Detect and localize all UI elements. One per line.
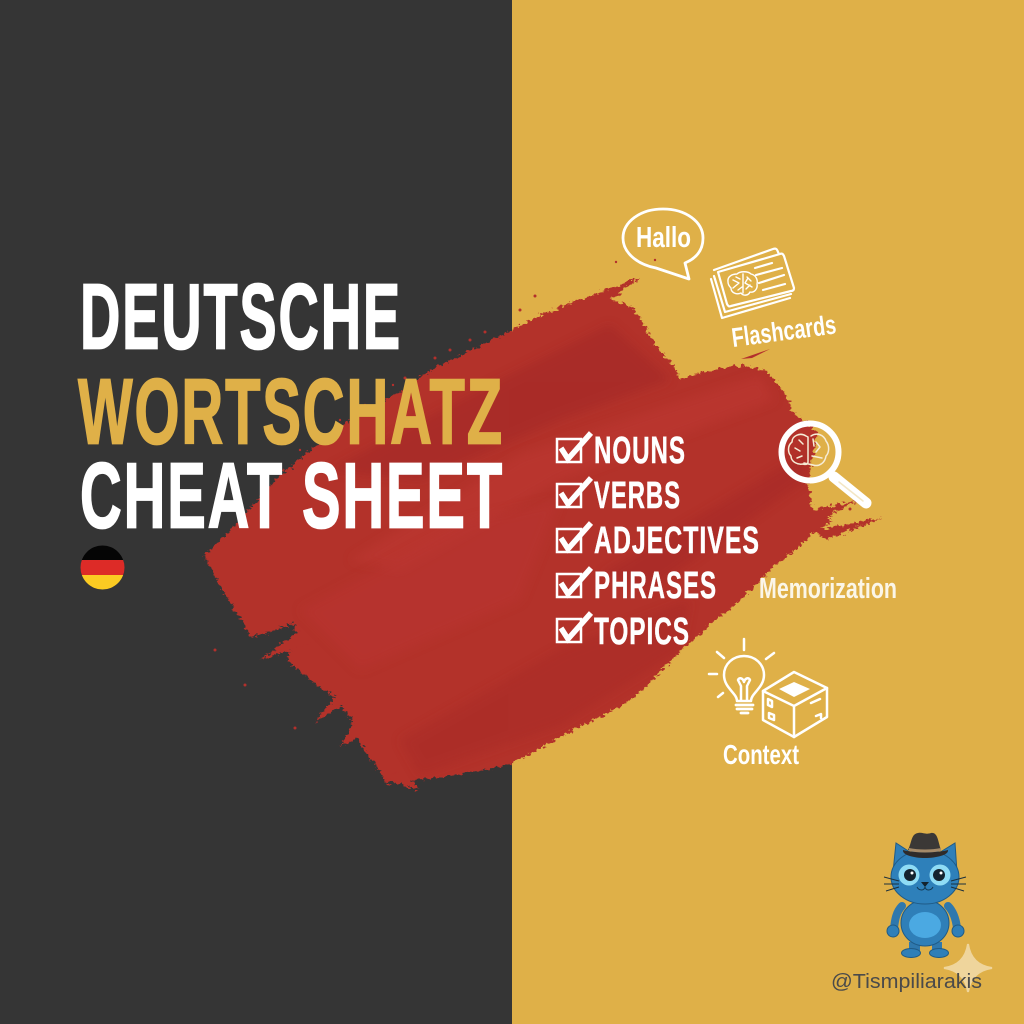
cat legs and feet	[909, 942, 942, 952]
cat head	[891, 850, 959, 904]
checklist	[557, 430, 760, 653]
item: adjectives	[557, 520, 760, 562]
icon: Hallo speech bubble: Hallo	[636, 222, 691, 254]
watermark handle: @Tismpiliarakis	[831, 971, 982, 993]
title line: CHEAT SHEET: CHEAT SHEET	[80, 444, 504, 548]
title line: DEUTSCHE: DEUTSCHE	[80, 264, 402, 368]
icon: Hallo speech bubble	[623, 209, 703, 279]
icon: flashcards stack	[711, 249, 794, 318]
cat hat	[908, 833, 941, 850]
item: topics	[557, 611, 690, 653]
brain inside lens	[788, 434, 829, 466]
paint specks	[214, 259, 852, 730]
item: verbs	[557, 475, 681, 517]
icon: magnifier with brain	[782, 424, 866, 503]
item: adjectives: ADJECTIVES	[594, 520, 760, 562]
icon: German flag circle	[80, 545, 125, 590]
panel: dark left background	[0, 0, 512, 1024]
paint streak under Flashcards	[741, 349, 770, 359]
item: nouns	[557, 430, 686, 472]
item: nouns: NOUNS	[594, 430, 686, 472]
title	[78, 264, 504, 548]
panel: yellow right background	[512, 0, 1024, 1024]
icon: light bulb	[709, 639, 774, 713]
cat whiskers	[884, 877, 966, 891]
cat arms	[894, 906, 957, 928]
watermark star	[944, 944, 992, 992]
cat eyes	[898, 864, 920, 886]
item: phrases: PHRASES	[594, 565, 717, 607]
item: verbs: VERBS	[594, 475, 681, 517]
label: Context: Context	[723, 739, 799, 770]
cat body	[901, 900, 949, 946]
cat nose and mouth	[921, 882, 929, 887]
label: Flashcards: Flashcards	[730, 310, 838, 353]
drip spikes	[260, 500, 882, 790]
mascot: blue cat with hat	[884, 833, 966, 958]
item: topics: TOPICS	[594, 611, 690, 653]
label: Memorization: Memorization	[759, 573, 897, 605]
brain on the card	[728, 272, 757, 295]
cat ears	[893, 843, 957, 872]
icon: context box	[763, 672, 827, 737]
red paint brush stroke	[204, 259, 882, 790]
title line: WORTSCHATZ: WORTSCHATZ	[78, 360, 504, 464]
item: phrases	[557, 565, 717, 607]
